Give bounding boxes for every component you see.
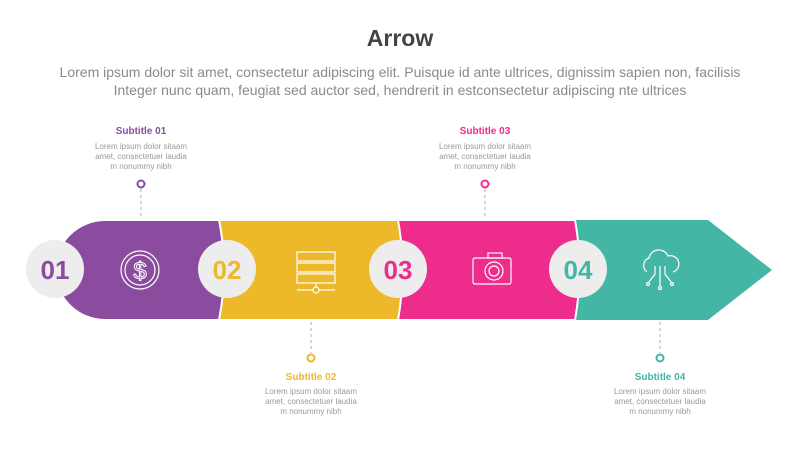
number circles: 04 bbox=[564, 255, 593, 285]
text block 1: Subtitle 01 bbox=[116, 126, 167, 137]
icon: server bbox=[297, 252, 335, 293]
icon: dollar coin: $ bbox=[133, 258, 147, 285]
text block 4: amet, consectetuer laudia bbox=[614, 397, 706, 406]
subtitle paragraph: Integer nunc quam, feugiat sed auctor sed, hendrerit in estconsectetur adipiscing nte ultrices bbox=[114, 82, 686, 98]
text block 2: Lorem ipsum dolor sitaam bbox=[265, 387, 357, 396]
subtitle paragraph: Lorem ipsum dolor sit amet, consectetur adipiscing elit. Puisque id ante ultrices, dignissim sapien non, facilisis bbox=[60, 64, 740, 80]
text block 4: m nonummy nibh bbox=[629, 407, 691, 416]
text block 2: m nonummy nibh bbox=[280, 407, 342, 416]
number circles: 01 bbox=[41, 255, 69, 285]
text block 4: Lorem ipsum dolor sitaam bbox=[614, 387, 706, 396]
text block 1: amet, consectetuer laudia bbox=[95, 152, 187, 161]
segment 2 yellow bbox=[200, 220, 402, 320]
title: Arrow bbox=[367, 25, 433, 51]
text block 2: amet, consectetuer laudia bbox=[265, 397, 357, 406]
text block 3 bbox=[439, 126, 531, 171]
text block 1: Lorem ipsum dolor sitaam bbox=[95, 142, 187, 151]
icon: cloud network bbox=[644, 250, 679, 290]
text block 1: m nonummy nibh bbox=[110, 162, 172, 171]
connectors bbox=[141, 189, 660, 353]
text block 2 bbox=[265, 372, 357, 416]
text block 4 bbox=[614, 372, 706, 416]
number circles: 02 bbox=[213, 255, 241, 285]
icon: dollar coin bbox=[121, 251, 159, 289]
markers bbox=[138, 180, 664, 362]
icon: camera bbox=[473, 253, 511, 284]
number circles bbox=[26, 240, 607, 298]
arrow band bbox=[55, 220, 772, 320]
segment 4 teal bbox=[560, 220, 772, 320]
text block 1 bbox=[95, 126, 187, 171]
segment 3 pink bbox=[380, 220, 580, 320]
segment 1 purple bbox=[55, 220, 224, 320]
text block 3: amet, consectetuer laudia bbox=[439, 152, 531, 161]
text block 3: Subtitle 03 bbox=[460, 126, 511, 137]
text block 3: m nonummy nibh bbox=[454, 162, 516, 171]
text block 2: Subtitle 02 bbox=[286, 372, 337, 383]
subtitle paragraph bbox=[60, 64, 740, 98]
text block 4: Subtitle 04 bbox=[635, 372, 686, 383]
number circles: 03 bbox=[384, 255, 412, 285]
text block 3: Lorem ipsum dolor sitaam bbox=[439, 142, 531, 151]
